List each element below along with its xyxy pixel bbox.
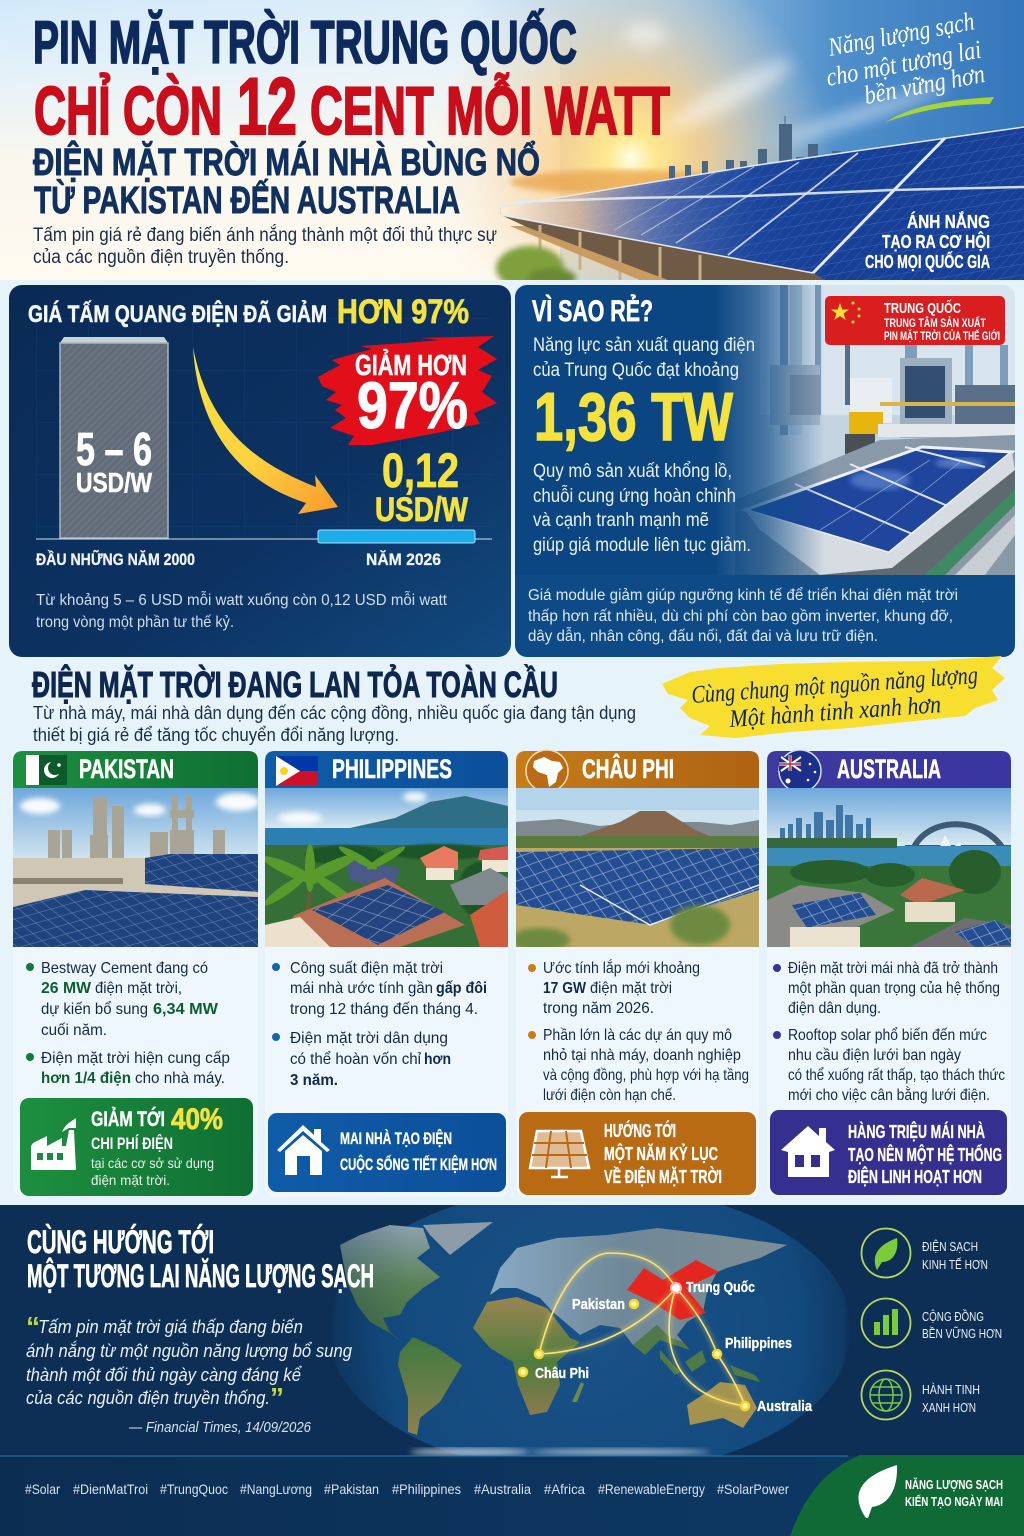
hashtags: #Africa xyxy=(544,1481,585,1497)
hashtags: #NangLương xyxy=(240,1481,312,1497)
icon: house xyxy=(781,1126,835,1177)
sunlight tagline: ÁNH NẮNG xyxy=(907,211,990,232)
bullets xyxy=(272,960,487,1089)
header xyxy=(13,751,258,788)
title: CENT MỖI WATT xyxy=(310,72,670,149)
intro text: của các nguồn điện truyền thống. xyxy=(33,247,289,268)
fade overlay xyxy=(515,285,822,575)
reasons: chuỗi cung ứng hoàn chỉnh xyxy=(533,485,736,507)
bullets: gấp đôi xyxy=(436,980,487,997)
callout: rooftop power xyxy=(268,1113,506,1192)
photo: cement plant with solar xyxy=(13,788,260,947)
section intro: thiết bị giá rẻ để tăng tốc chuyển đổi năng lượng. xyxy=(33,725,399,745)
reasons: Quy mô sản xuất khổng lồ, xyxy=(533,461,732,482)
header xyxy=(265,751,508,788)
map labels: Australia xyxy=(757,1398,813,1415)
bullets: điện dân dụng. xyxy=(788,1000,881,1017)
benefit: planet: HÀNH TINH xyxy=(922,1382,980,1397)
quote: ” xyxy=(270,1382,284,1413)
bullets: trong 12 tháng đến tháng 4. xyxy=(290,1001,478,1018)
benefit: cleaner: ĐIỆN SẠCH xyxy=(922,1239,978,1254)
title: PIN MẶT TRỜI TRUNG QUỐC xyxy=(33,9,577,76)
bullets: Điện mặt trời hiện cung cấp xyxy=(41,1050,230,1067)
hashtags: #Philippines xyxy=(392,1481,461,1497)
bullets: hơn xyxy=(424,1051,451,1068)
bullets: Ước tính lắp mới khoảng xyxy=(543,958,700,977)
photo: Sydney rooftops xyxy=(767,788,1011,947)
bullets: Rooftop solar phổ biến đến mức xyxy=(788,1026,987,1044)
panel heading: GIÁ TẤM QUANG ĐIỆN ĐÃ GIẢM xyxy=(28,299,327,328)
header xyxy=(0,0,1024,290)
bullets xyxy=(528,958,749,1104)
header: PHILIPPINES xyxy=(332,754,452,784)
callout: 40% saving xyxy=(20,1098,253,1196)
skyline xyxy=(669,116,841,180)
handwritten slogan: bền vững hơn xyxy=(862,59,987,110)
callout: 40% saving: 40% xyxy=(171,1103,223,1136)
bullets: nhỏ tại nhà máy, doanh nghiệp xyxy=(543,1047,741,1064)
heading: VÌ SAO RẺ? xyxy=(532,294,653,328)
cost note: thấp hơn rất nhiều, dù chi phí còn bao gồm inverter, khung đỡ, xyxy=(528,608,953,625)
hashtags: #Australia xyxy=(474,1481,531,1497)
callout: 40% saving: CHI PHÍ ĐIỆN xyxy=(91,1134,173,1153)
callout: record year: HƯỚNG TỚI xyxy=(604,1120,676,1141)
hashtags: #Pakistan xyxy=(324,1481,379,1497)
photo: ground-mount solar xyxy=(510,788,759,952)
bar: 2026 xyxy=(318,530,475,543)
bullets: 17 GW xyxy=(543,980,587,997)
arrow xyxy=(193,347,338,514)
handwritten slogan: cho một tương lai xyxy=(824,35,983,92)
cost note: dây dẫn, nhân công, đấu nối, đất đai và lưu trữ điện. xyxy=(528,628,878,645)
callout: 40% saving: tại các cơ sở sử dụng xyxy=(91,1155,214,1171)
icon: house xyxy=(277,1125,330,1175)
header: CHÂU PHI xyxy=(582,753,674,784)
title: CHỈ CÒN xyxy=(34,72,222,149)
callout: record year: MỘT NĂM KỶ LỤC xyxy=(604,1143,718,1164)
bullets: nhu cầu điện lưới ban ngày xyxy=(788,1047,961,1064)
hashtags: #TrungQuoc xyxy=(160,1481,228,1497)
bullets: mái nhà ước tính gần xyxy=(290,980,433,997)
subtitle: TỪ PAKISTAN ĐẾN AUSTRALIA xyxy=(34,178,460,222)
quote: ánh nắng từ một nguồn năng lượng bổ sung xyxy=(26,1341,352,1361)
quote: — Financial Times, 14/09/2026 xyxy=(128,1419,312,1436)
benefit: cleaner: KINH TẾ HƠN xyxy=(922,1257,988,1272)
bullets: và cộng đồng, phù hợp với hạ tầng xyxy=(543,1067,749,1084)
title: 12 xyxy=(237,62,297,152)
panel: price fall xyxy=(9,285,511,657)
bullets: cho nhà máy. xyxy=(135,1070,225,1087)
photo: tropical roofs xyxy=(260,788,508,947)
callout: millions of roofs xyxy=(770,1110,1007,1195)
bullets: 3 năm. xyxy=(290,1072,338,1089)
bullets: 6,34 MW xyxy=(153,1001,219,1018)
yellow brush slogan: Một hành tinh xanh hơn xyxy=(728,691,942,733)
intro text xyxy=(33,224,497,268)
cost note: Giá module giảm giúp ngưỡng kinh tế để triển khai điện mặt trời xyxy=(528,587,958,604)
bullets: Bestway Cement đang có xyxy=(41,960,208,977)
card: Australia xyxy=(767,750,1011,1197)
description: Từ khoảng 5 – 6 USD mỗi watt xuống còn 0,12 USD mỗi watt xyxy=(36,590,448,609)
benefit: planet: XANH HƠN xyxy=(922,1400,976,1415)
callout: down 97% xyxy=(318,336,497,445)
factory photo xyxy=(735,285,1015,575)
axis labels: ĐẦU NHỮNG NĂM 2000 xyxy=(36,549,195,569)
hashtags: #RenewableEnergy xyxy=(598,1481,705,1497)
bullets: cuối năm. xyxy=(41,1022,107,1039)
value: 2026 xyxy=(375,445,469,529)
bullets: 26 MW xyxy=(41,980,92,997)
callout: 40% saving: điện mặt trời. xyxy=(91,1172,170,1188)
header: PAKISTAN xyxy=(79,754,174,784)
China highlight xyxy=(627,1260,719,1320)
callout: rooftop power: MAI NHÀ TẠO ĐIỆN xyxy=(340,1129,452,1148)
cost note xyxy=(515,575,1015,657)
handwritten slogan: Năng lượng sạch xyxy=(825,6,977,62)
benefit: communities xyxy=(862,1298,1002,1348)
bar: early 2000s: USD/W xyxy=(76,467,152,498)
bullets: Công suất điện mặt trời xyxy=(290,960,443,977)
section heading: ĐIỆN MẶT TRỜI ĐANG LAN TỎA TOÀN CẦU xyxy=(32,663,558,705)
title xyxy=(35,8,670,136)
value: 2026: 0,12 xyxy=(382,445,459,498)
header xyxy=(767,750,1011,792)
panel: why cheap xyxy=(515,285,1015,657)
bullets: dự kiến bổ sung xyxy=(41,1000,148,1018)
bullets: Phần lớn là các dự án quy mô xyxy=(543,1027,732,1044)
bullets: mới cho việc cân bằng lưới điện. xyxy=(788,1085,990,1104)
map labels: Trung Quốc xyxy=(686,1279,755,1296)
heading: CÙNG HƯỚNG TỚI xyxy=(27,1224,214,1260)
header: AUSTRALIA xyxy=(837,754,941,784)
description: trong vòng một phần tư thế kỷ. xyxy=(36,614,234,631)
hashtags: #Solar xyxy=(25,1481,60,1497)
hashtags: #DienMatTroi xyxy=(73,1481,148,1497)
bullets: Điện mặt trời dân dụng xyxy=(290,1030,448,1047)
card: Pakistan xyxy=(13,751,260,1197)
map labels: Pakistan xyxy=(572,1296,625,1313)
quote: thành một đối thủ ngày càng đáng kể xyxy=(26,1365,302,1385)
section intro xyxy=(33,703,636,745)
capacity text: Năng lực sản xuất quang điện xyxy=(533,335,755,356)
sunlight tagline: TẠO RA CƠ HỘI xyxy=(882,231,990,252)
value: 2026: USD/W xyxy=(375,491,469,529)
quote: Tấm pin mặt trời giá thấp đang biến xyxy=(38,1317,303,1337)
yellow brush slogan xyxy=(662,656,1005,738)
bullets: lưới điện còn hạn chế. xyxy=(543,1087,676,1104)
bullets: có thể hoàn vốn chỉ xyxy=(290,1050,421,1068)
callout: down 97%: GIẢM HƠN xyxy=(355,348,467,382)
panel heading: HƠN 97% xyxy=(337,293,469,331)
hashtags: #SolarPower xyxy=(717,1481,789,1497)
card: Africa xyxy=(510,750,759,1197)
section intro: Từ nhà máy, mái nhà dân dụng đến các cộng đồng, nhiều quốc gia đang tận dụng xyxy=(33,703,636,723)
bullets: điện mặt trời xyxy=(590,980,672,997)
icon: leaf xyxy=(858,1465,897,1518)
axis labels xyxy=(36,549,441,569)
world map xyxy=(334,1205,846,1456)
footer strip xyxy=(0,1455,1024,1536)
benefit: communities: CỘNG ĐỒNG xyxy=(922,1309,984,1324)
callout: record year xyxy=(519,1112,756,1195)
map labels: Châu Phi xyxy=(535,1365,589,1382)
quote: “ xyxy=(26,1311,40,1342)
bar: early 2000s: 5 – 6 xyxy=(76,423,152,475)
quote: của các nguồn điện truyền thống. xyxy=(26,1388,270,1408)
handwritten slogan xyxy=(824,6,994,122)
benefit: communities: BỀN VỮNG HƠN xyxy=(922,1326,1002,1341)
subtitle xyxy=(32,140,540,214)
big number: 1,36 TW xyxy=(534,379,734,455)
badge: China xyxy=(825,296,1005,345)
callout: record year: VỀ ĐIỆN MẶT TRỜI xyxy=(604,1166,722,1187)
bar: early 2000s xyxy=(60,337,168,538)
hashtags xyxy=(25,1481,789,1497)
callout: 40% saving: GIẢM TỚI xyxy=(91,1107,165,1131)
bullets: hơn 1/4 điện xyxy=(41,1070,131,1087)
benefit: cleaner xyxy=(862,1228,988,1278)
badge: China: TRUNG TÂM SẢN XUẤT xyxy=(884,315,986,330)
panel heading xyxy=(28,293,469,331)
sunlight tagline xyxy=(865,211,990,272)
map points xyxy=(519,1300,749,1410)
description xyxy=(36,590,448,631)
bullets xyxy=(26,960,230,1087)
intro text: Tấm pin giá rẻ đang biến ánh nắng thành một đối thủ thực sự xyxy=(33,224,497,246)
badge: China: TRUNG QUỐC xyxy=(884,299,961,317)
routes xyxy=(539,1253,745,1406)
reasons: giúp giá module liên tục giảm. xyxy=(533,535,751,556)
capacity text xyxy=(533,335,755,381)
panel: clean-energy future xyxy=(0,1185,1024,1536)
bullets: điện mặt trời, xyxy=(95,980,182,997)
map labels xyxy=(535,1279,813,1415)
callout: rooftop power: CUỘC SỐNG TIẾT KIỆM HƠN xyxy=(340,1154,497,1174)
heading xyxy=(27,1224,374,1294)
reasons: và cạnh tranh mạnh mẽ xyxy=(533,510,709,531)
icon: factory xyxy=(31,1118,76,1170)
axis labels: NĂM 2026 xyxy=(366,550,441,569)
reasons xyxy=(533,461,751,556)
icon: solar panel xyxy=(530,1131,589,1177)
capacity text: của Trung Quốc đạt khoảng xyxy=(533,360,739,381)
solar array xyxy=(500,127,1024,280)
benefit: planet xyxy=(862,1370,980,1420)
map labels: Philippines xyxy=(725,1335,792,1352)
bullets xyxy=(773,960,1005,1104)
support frame and trees xyxy=(492,216,825,280)
card: Philippines xyxy=(260,751,508,1197)
brand corner xyxy=(790,1455,1024,1536)
bullets: trong năm 2026. xyxy=(543,1000,654,1017)
heading: MỘT TƯƠNG LAI NĂNG LƯỢNG SẠCH xyxy=(27,1258,374,1294)
quote xyxy=(26,1311,352,1436)
subtitle: ĐIỆN MẶT TRỜI MÁI NHÀ BÙNG NỔ xyxy=(33,139,540,184)
callout: down 97%: 97% xyxy=(357,368,468,442)
header xyxy=(516,750,759,792)
